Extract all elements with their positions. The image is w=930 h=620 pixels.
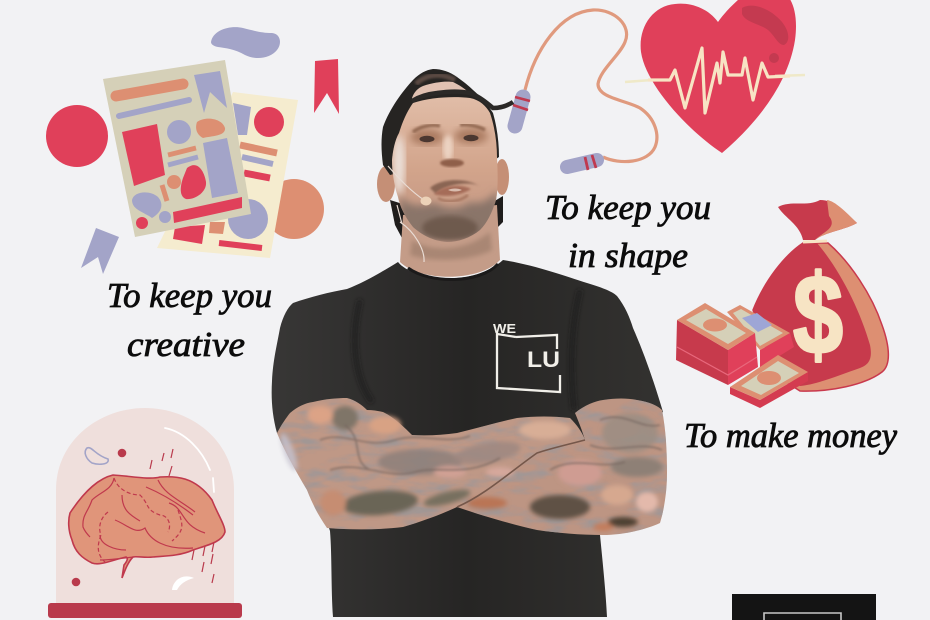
facial features — [413, 125, 485, 201]
left cash stack — [676, 303, 758, 385]
caption: to keep you creative — [107, 276, 272, 364]
logo badge — [732, 594, 876, 620]
blue bean — [85, 448, 108, 464]
neck shadow — [410, 232, 492, 260]
money bag — [753, 200, 888, 391]
caption: to keep you in shape: To keep you — [545, 188, 711, 227]
cap rear lower flaps — [390, 196, 503, 240]
back cash stack — [727, 305, 794, 368]
tattoo shading — [277, 406, 663, 531]
face — [392, 97, 498, 242]
glass dome — [56, 408, 234, 604]
rope handle upper — [513, 97, 530, 126]
red circle — [46, 105, 108, 167]
lavender bookmark — [81, 228, 119, 274]
caption: to keep you creative: creative — [127, 325, 245, 364]
face light side — [393, 135, 405, 195]
back paper — [157, 92, 298, 258]
caption: to keep you creative: To keep you — [107, 276, 272, 315]
cap — [382, 69, 499, 175]
cap top sheen — [416, 75, 455, 84]
front cash stack — [730, 355, 808, 408]
dome base — [48, 603, 242, 618]
dots — [72, 449, 126, 586]
nose highlight — [443, 135, 453, 161]
shirt logo: LU — [527, 347, 560, 372]
shirt logo — [493, 321, 560, 392]
illustration: heart with pulse — [625, 0, 805, 153]
cap strap — [412, 92, 513, 108]
forehead window — [412, 82, 468, 100]
ears — [377, 159, 509, 202]
neck — [400, 205, 500, 277]
tattoo swirl lines — [320, 417, 662, 474]
rope handle lower — [567, 155, 597, 170]
shirt collar shading — [408, 264, 498, 280]
shirt — [272, 260, 663, 617]
illustration: creative papers and shapes — [46, 27, 339, 274]
illustration: brain in glass dome — [48, 408, 242, 618]
shirt logo: WE — [493, 321, 516, 336]
orange circle — [264, 179, 324, 239]
red bookmark — [314, 59, 339, 114]
illustration: money bag and cash — [676, 200, 888, 408]
dome highlights — [165, 428, 214, 590]
front paper — [103, 60, 251, 237]
brain — [69, 475, 225, 578]
left arm — [277, 398, 585, 529]
caption: to keep you in shape: in shape — [568, 236, 688, 275]
caption: to keep you in shape — [545, 188, 711, 275]
caption: to make money: To make money — [684, 416, 897, 455]
photo: man with crossed arms — [272, 69, 667, 617]
lavender blob — [211, 27, 280, 58]
rain dashes — [150, 449, 214, 583]
eye sockets — [410, 128, 488, 145]
chin beard — [422, 216, 478, 240]
headset mic — [388, 166, 432, 262]
arm crossing line — [457, 440, 585, 507]
jaw stubble — [400, 190, 498, 240]
shirt folds — [355, 290, 580, 410]
illustration: jump rope — [513, 10, 657, 170]
right arm — [457, 398, 667, 535]
money bag: $ — [793, 253, 843, 377]
